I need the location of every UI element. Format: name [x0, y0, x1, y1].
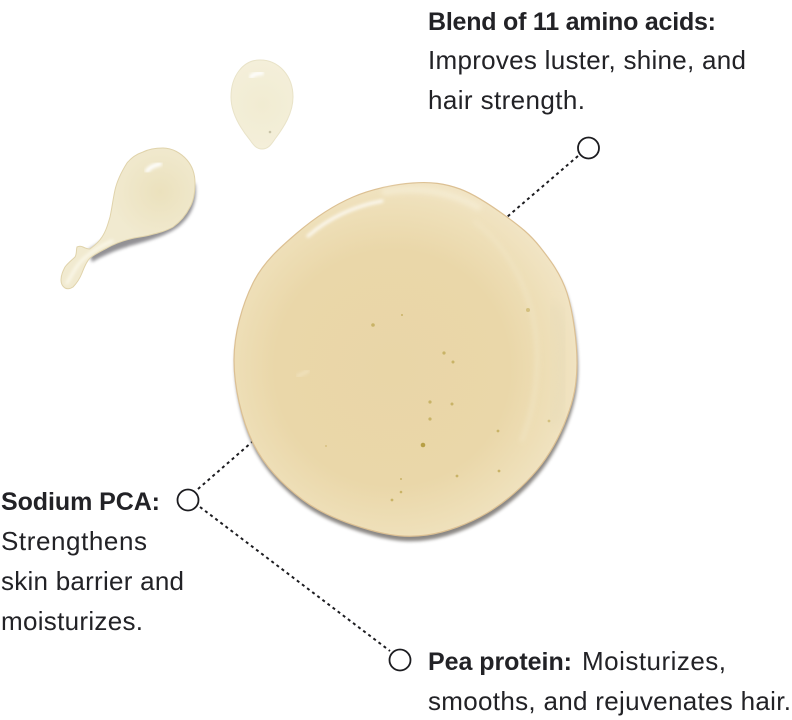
callout: pea protein: Pea protein: [428, 648, 572, 676]
callout: pea protein: Moisturizes, [582, 646, 726, 676]
callout: pea protein: smooths, and rejuvenates hair. [428, 686, 791, 716]
callout: amino acids: Blend of 11 amino acids: [428, 8, 716, 36]
tailed droplet [61, 148, 196, 289]
callout: amino acids [428, 8, 746, 115]
marker: amino acids [578, 138, 599, 158]
marker: sodium PCA [178, 490, 198, 510]
marker: pea protein [390, 650, 410, 670]
callout: sodium PCA [1, 488, 184, 636]
callout: sodium PCA: skin barrier and [1, 566, 184, 596]
callout: sodium PCA: moisturizes. [1, 606, 143, 636]
callout: pea protein [428, 646, 791, 716]
callout: sodium PCA: Strengthens [1, 526, 147, 556]
callout: sodium PCA: Sodium PCA: [1, 488, 160, 516]
droplet highlights [298, 190, 562, 440]
callout: amino acids: Improves luster, shine, and [428, 45, 746, 75]
small teardrop droplet [231, 60, 293, 149]
large serum droplet [234, 183, 578, 541]
droplet specks [325, 308, 550, 501]
connector lines [198, 156, 578, 651]
callout: amino acids: hair strength. [428, 85, 585, 115]
